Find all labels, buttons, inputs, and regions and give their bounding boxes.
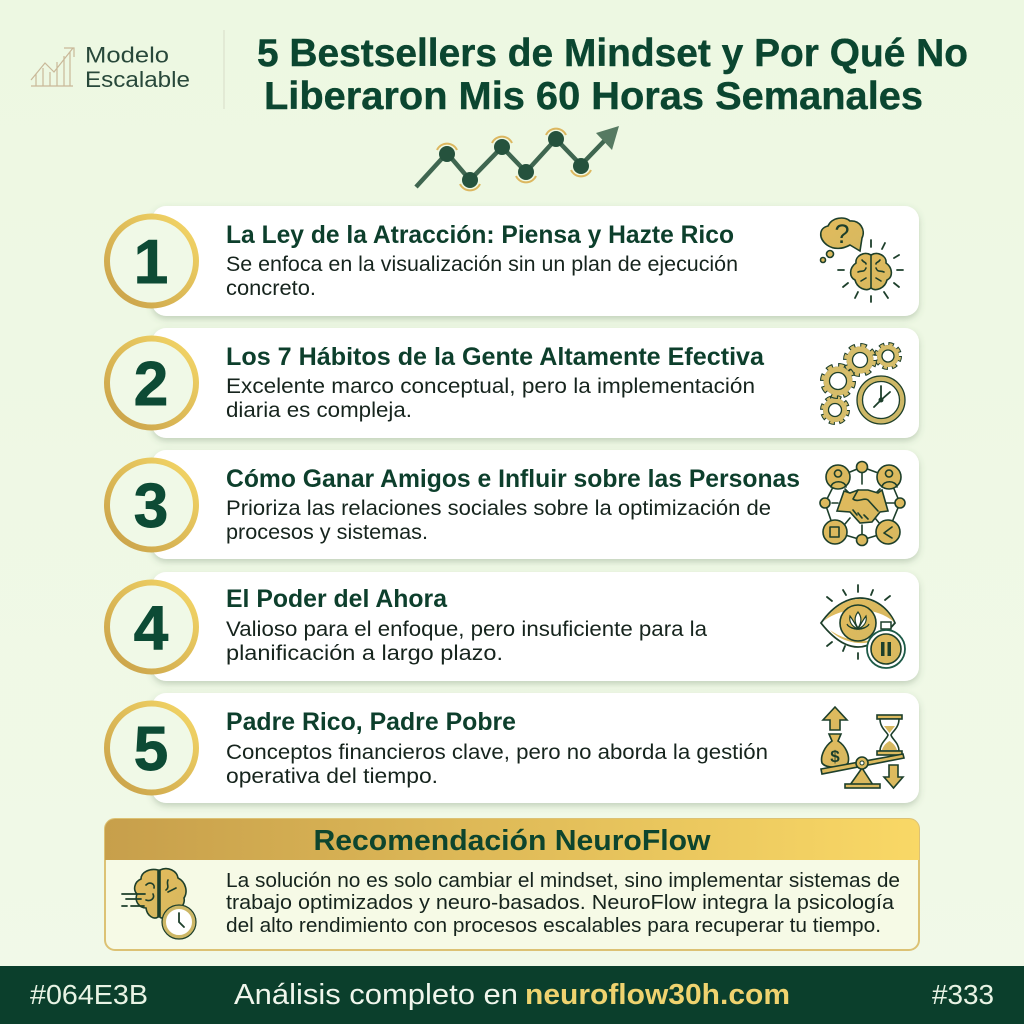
icon: growth zigzag arrow	[416, 126, 619, 190]
item 3 text: Cómo Ganar Amigos e Influir sobre las Personas	[226, 465, 800, 493]
item 1 text: concreto.	[226, 277, 316, 300]
number badge 3: 3	[134, 472, 168, 541]
recommendation text: La solución no es solo cambiar el mindset, sino implementar sistemas de	[226, 869, 900, 892]
footer bar: #064E3B	[30, 979, 148, 1010]
footer bar: #333	[932, 979, 994, 1010]
icon: scale, money bag, hourglass and arrows: $	[830, 747, 840, 766]
panel: item 4	[107, 572, 919, 681]
item 5 text: Conceptos financieros clave, pero no aborda la gestión	[226, 741, 768, 764]
number badge 1: 1	[134, 228, 168, 297]
icon: brain with clock	[122, 869, 196, 939]
recommendation text	[226, 869, 900, 937]
number badge 1	[107, 216, 196, 306]
item 4 text: planificación a largo plazo.	[226, 642, 503, 665]
panel: item 5	[107, 693, 919, 803]
title: Liberaron Mis 60 Horas Semanales	[264, 75, 923, 118]
item 2 text: Excelente marco conceptual, pero la implementación	[226, 375, 755, 398]
item 1 text: La Ley de la Atracción: Piensa y Hazte Rico	[226, 221, 734, 249]
item 3 text: procesos y sistemas.	[226, 521, 428, 544]
icon: gears and clock	[823, 345, 905, 424]
number badge 4	[107, 582, 196, 672]
recommendation text: del alto rendimiento con procesos escalables para recuperar tu tiempo.	[226, 914, 881, 937]
panel: item 3	[107, 450, 919, 559]
footer bar	[0, 966, 1024, 1024]
item 5 text	[226, 708, 768, 788]
icon: eye, lotus and stopwatch	[821, 585, 905, 668]
number badge 3	[107, 460, 196, 550]
item 2 text: diaria es compleja.	[226, 399, 412, 422]
recommendation text: trabajo optimizados y neuro-basados. NeuroFlow integra la psicología	[226, 891, 895, 914]
logo: Modelo Escalable: Escalable	[85, 67, 190, 92]
panel: Recomendación NeuroFlow	[105, 819, 919, 950]
title	[257, 32, 968, 118]
icon: thought bubble and brain: ?	[834, 219, 850, 249]
number badge 5: 5	[134, 715, 168, 784]
logo: Modelo Escalable: Modelo	[85, 42, 169, 68]
item 3 text	[226, 465, 800, 544]
item 1 text: Se enfoca en la visualización sin un plan de ejecución	[226, 253, 738, 276]
item 4 text: Valioso para el enfoque, pero insuficiente para la	[226, 618, 707, 641]
item 5 text: operativa del tiempo.	[226, 765, 438, 788]
number badge 2	[107, 338, 196, 428]
item 3 text: Prioriza las relaciones sociales sobre la optimización de	[226, 497, 771, 520]
footer bar: neuroflow30h.com	[525, 979, 790, 1011]
icon: thought bubble and brain	[820, 218, 903, 302]
recommendation header: Recomendación NeuroFlow	[314, 825, 711, 857]
item 2 text	[226, 343, 765, 422]
title: 5 Bestsellers de Mindset y Por Qué No	[257, 32, 968, 75]
icon: scale, money bag, hourglass and arrows	[821, 707, 904, 788]
icon: handshake network	[820, 462, 905, 546]
item 1 text	[226, 221, 738, 300]
number badge 5	[107, 704, 196, 792]
number badge 4: 4	[134, 594, 169, 663]
logo: Modelo Escalable	[31, 42, 190, 92]
item 2 text: Los 7 Hábitos de la Gente Altamente Efectiva	[226, 343, 765, 371]
footer bar: Análisis completo en	[234, 979, 518, 1011]
number badge 2: 2	[134, 350, 168, 419]
item 4 text	[226, 585, 707, 665]
recommendation header	[105, 819, 919, 860]
item 4 text: El Poder del Ahora	[226, 585, 448, 613]
panel: item 2	[107, 328, 919, 438]
item 5 text: Padre Rico, Padre Pobre	[226, 708, 516, 736]
panel: item 1	[107, 206, 919, 316]
